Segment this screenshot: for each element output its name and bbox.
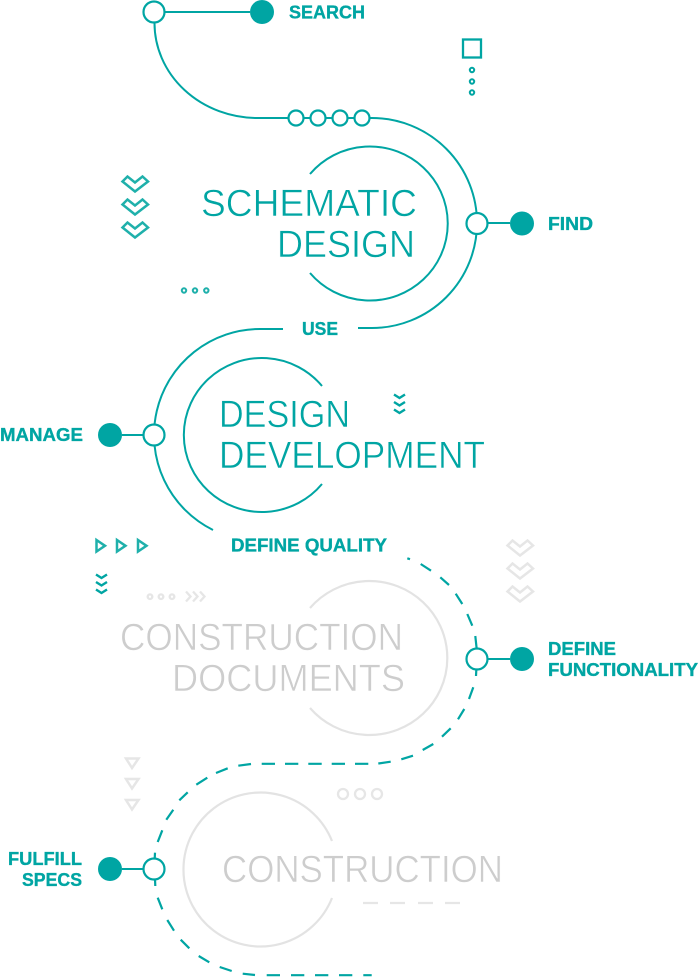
node: fulfill specs: FULFILL bbox=[8, 849, 82, 869]
icon: teal chevrons large bbox=[122, 176, 148, 238]
icon: grey dashes bbox=[363, 902, 460, 904]
icon: grey rings bbox=[338, 789, 382, 799]
panel: schematic design: SCHEMATIC bbox=[201, 183, 417, 225]
node: manage: MANAGE bbox=[0, 425, 83, 445]
panel: schematic design bbox=[201, 146, 448, 300]
panel: construction bbox=[183, 792, 503, 946]
node: search: SEARCH bbox=[289, 2, 365, 22]
node: find: FIND bbox=[548, 214, 593, 234]
label: define quality: DEFINE QUALITY bbox=[231, 536, 387, 556]
connector path: use to define quality bbox=[154, 329, 283, 530]
node: manage bbox=[0, 423, 164, 447]
node: fulfill specs bbox=[8, 849, 164, 890]
icon: triangles row bbox=[96, 540, 146, 552]
icon: square with dots bbox=[463, 40, 481, 95]
node: fulfill specs: SPECS bbox=[22, 870, 82, 890]
icon: small chevrons right bbox=[394, 394, 405, 413]
panel: construction documents: CONSTRUCTION bbox=[120, 617, 403, 659]
panel: design development bbox=[184, 358, 485, 512]
panel: construction documents: DOCUMENTS bbox=[172, 658, 405, 700]
node: search bbox=[144, 0, 365, 24]
connector path: search to use bbox=[154, 23, 477, 328]
panel: construction documents bbox=[120, 581, 447, 735]
milestone beads bbox=[288, 110, 370, 126]
panel: design development: DEVELOPMENT bbox=[219, 435, 485, 477]
node: define functionality: DEFINE bbox=[548, 639, 616, 659]
panel: design development: DESIGN bbox=[219, 394, 350, 436]
icon: grey triangles bbox=[126, 758, 138, 810]
icon: teal dots row bbox=[182, 288, 208, 293]
label: use: USE bbox=[302, 319, 338, 339]
panel: construction: CONSTRUCTION bbox=[222, 849, 503, 891]
dashed connector path: define quality to end bbox=[155, 558, 477, 975]
panel: schematic design: DESIGN bbox=[277, 224, 415, 266]
node: define functionality bbox=[466, 639, 698, 680]
node: find bbox=[466, 212, 593, 236]
icon: grey dots and arrows bbox=[148, 592, 204, 602]
node: define functionality: FUNCTIONALITY bbox=[548, 660, 698, 680]
icon: small chevrons left bbox=[96, 574, 107, 593]
icon: grey chevrons bbox=[508, 540, 533, 602]
